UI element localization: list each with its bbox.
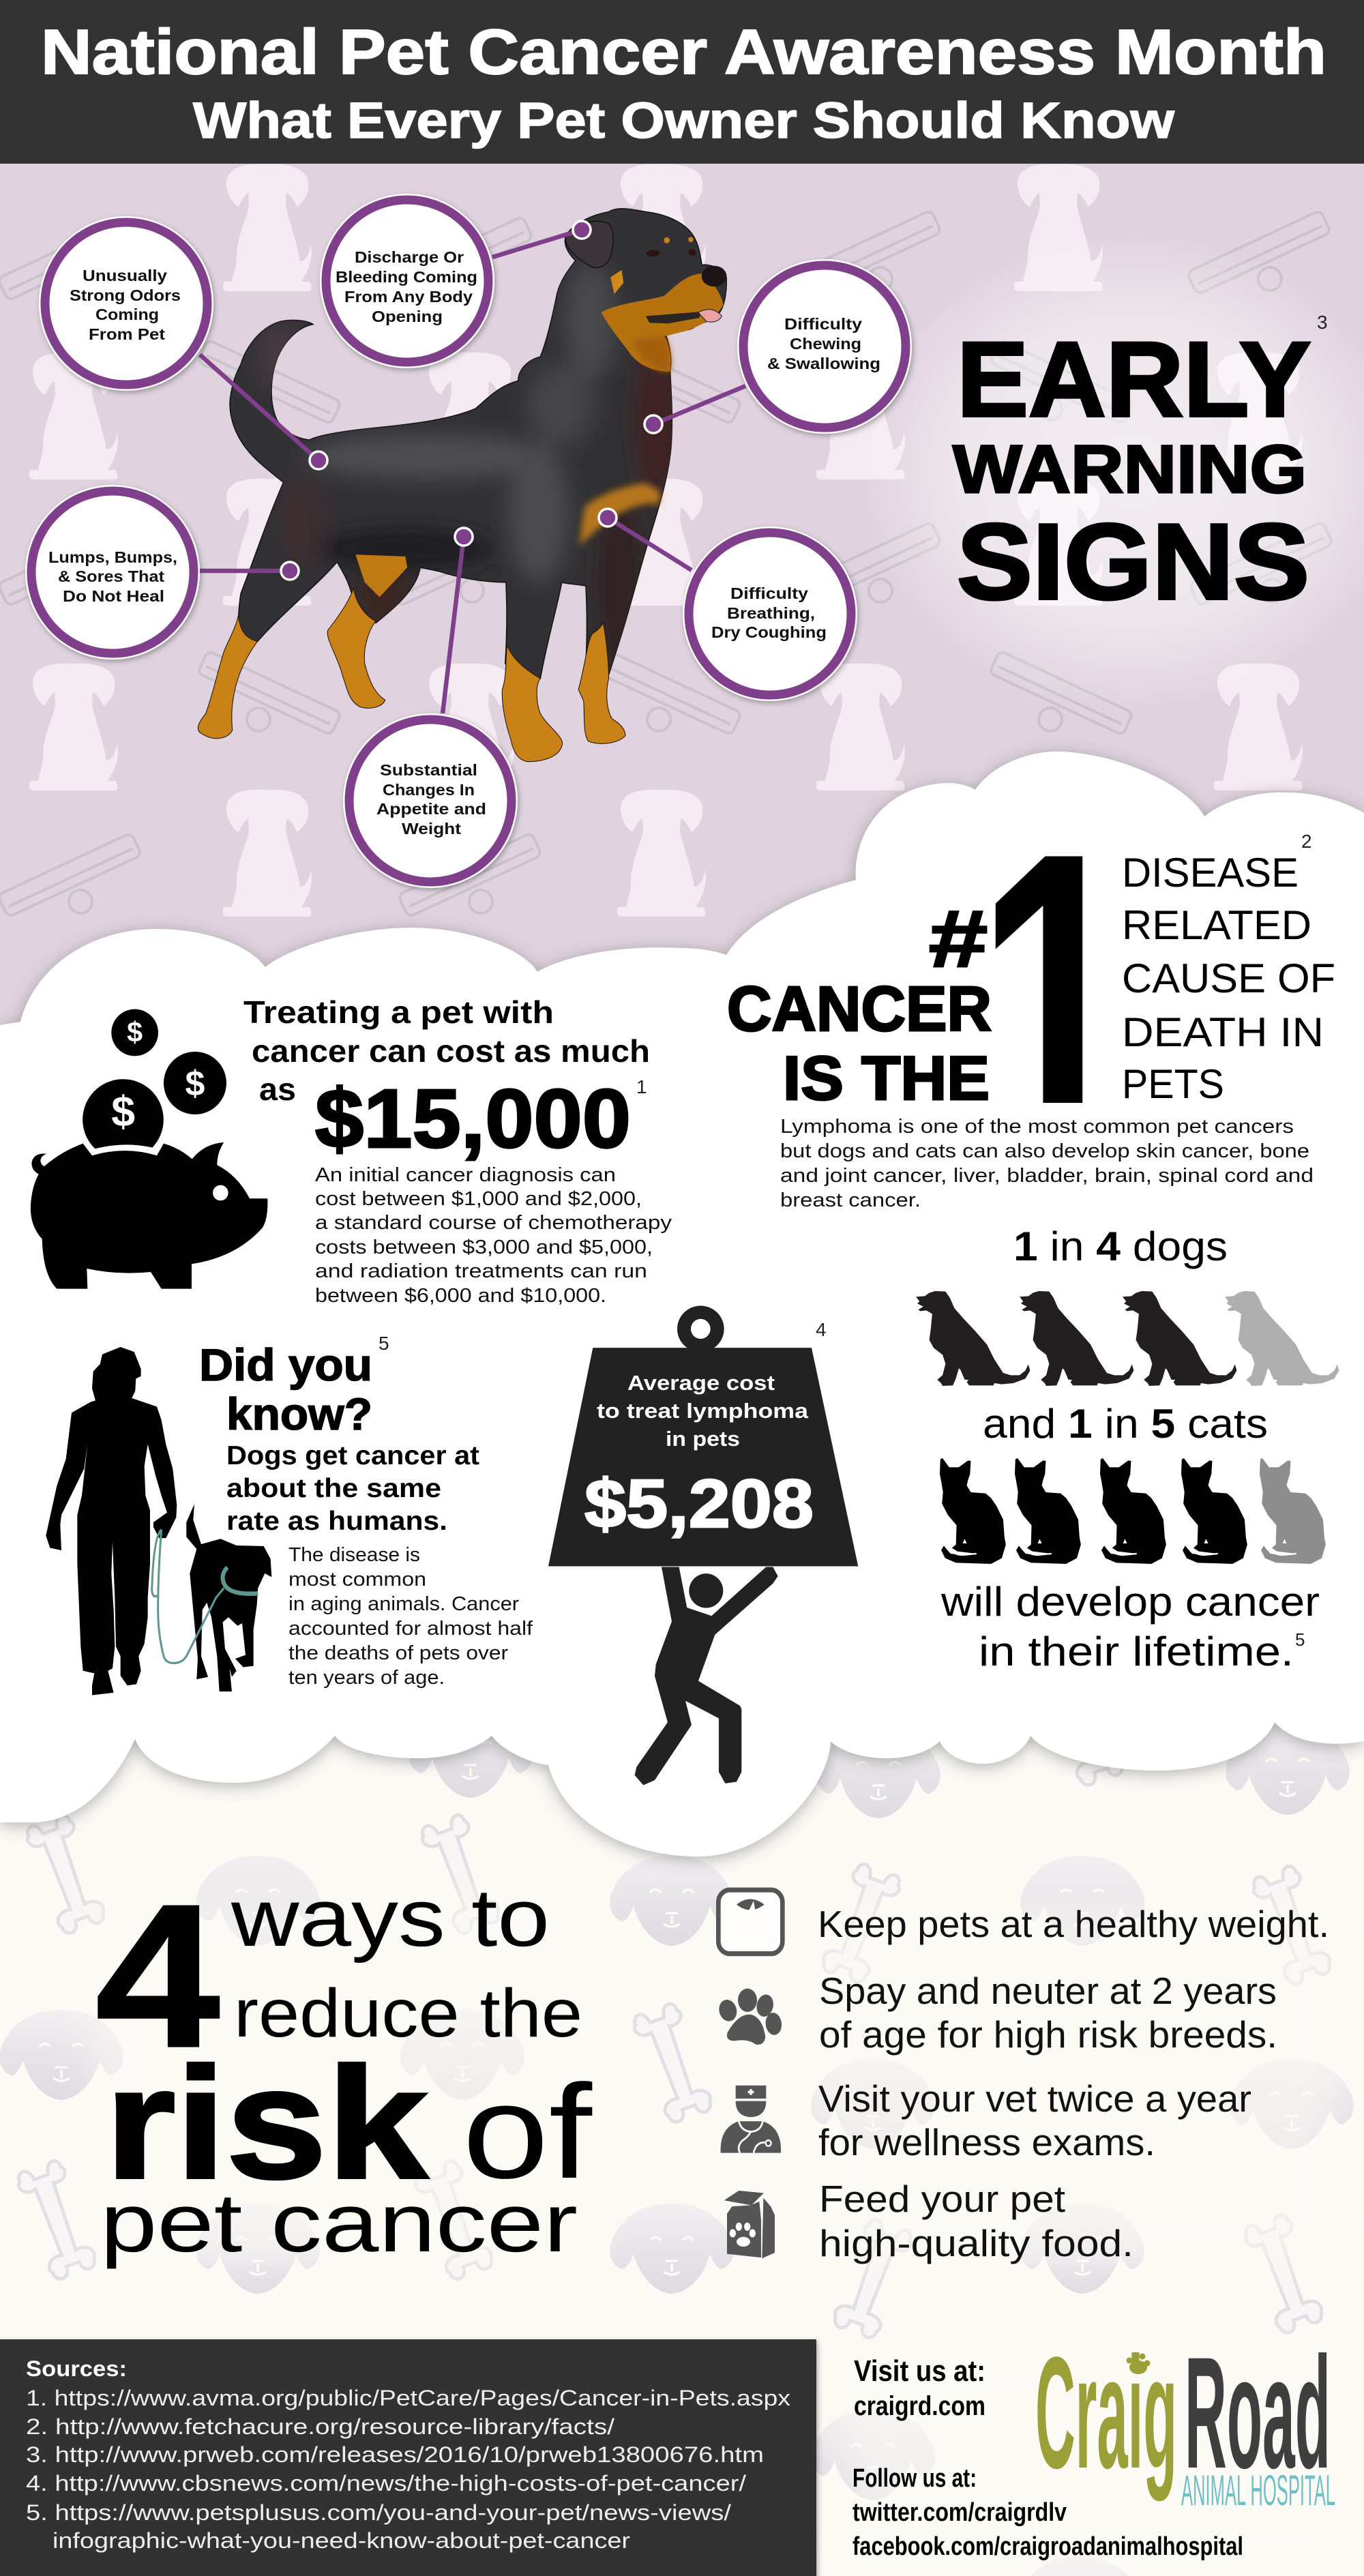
icons: four dogs	[916, 1291, 1339, 1386]
callout: lumps	[25, 485, 200, 660]
soft halo behind cream section text	[95, 1896, 1350, 2571]
icon: logo paw	[1127, 2352, 1150, 2374]
callout: breathing: Difficulty	[730, 584, 808, 602]
source list: 3. http://www.prweb.com/releases/2016/10/prweb13800676.htm	[26, 2442, 764, 2467]
text: did you know: Dogs get cancer at	[226, 1441, 479, 1470]
text: average cost: Average cost	[627, 1371, 775, 1395]
callout: chewing	[737, 259, 912, 434]
panel: sources	[0, 2339, 816, 2576]
text: did you know: about the same	[226, 1474, 441, 1503]
heading: early warning signs: WARNING	[953, 431, 1307, 507]
callout: discharge	[320, 194, 494, 368]
source note 5: 5	[379, 1333, 389, 1354]
text: average cost: to treat lymphoma	[597, 1399, 809, 1423]
text: risk reduction list	[818, 1903, 1329, 2264]
background: purple section	[0, 164, 1364, 1391]
callout: strong odors: Coming	[95, 306, 159, 323]
text: did you know	[199, 1339, 479, 1536]
illustration: rottweiler	[198, 209, 727, 762]
callout: strong odors: From Pet	[89, 325, 165, 343]
source list: 4. http://www.cbsnews.com/news/the-high-costs-of-pet-cancer/	[26, 2471, 746, 2496]
callout: discharge: Bleeding Coming	[336, 268, 477, 286]
text: did you know: rate as humans.	[226, 1507, 447, 1536]
callout: chewing: Difficulty	[784, 315, 862, 333]
text: disease related cause: RELATED	[1122, 902, 1311, 948]
text: contact details: twitter.com/craigrdlv	[853, 2498, 1067, 2527]
text: average cost: $5,208	[584, 1466, 814, 1542]
heading: early warning signs: SIGNS	[957, 502, 1309, 622]
text: cost paragraph	[315, 1164, 672, 1307]
icon: vet	[721, 2086, 781, 2153]
callout: breathing	[683, 527, 857, 701]
text: lymphoma paragraph: and joint cancer, liver, bladder, brain, spinal cord and	[780, 1165, 1314, 1187]
text: contact details: Follow us at:	[853, 2464, 977, 2493]
icon: woman walking dog	[46, 1347, 271, 1696]
callout: appetite: Substantial	[380, 761, 477, 779]
text: lymphoma paragraph: Lymphoma is one of the most common pet cancers	[780, 1116, 1294, 1138]
icons: risk reduction	[716, 1890, 783, 2258]
text: risk reduction list: high-quality food.	[819, 2222, 1133, 2264]
text: risk reduction list: Spay and neuter at 2 years	[819, 1970, 1277, 2012]
icon: piggy bank with coins: $	[127, 1016, 143, 1048]
callout: breathing: Breathing,	[727, 604, 815, 622]
text: treating cost heading: Treating a pet with	[243, 994, 554, 1030]
marker dots	[281, 221, 662, 580]
text: contact details	[853, 2354, 1243, 2561]
callout: lumps: Do Not Heal	[63, 587, 164, 605]
text: risk reduction list: for wellness exams.	[818, 2121, 1155, 2163]
text: did you know: know?	[226, 1389, 372, 1439]
text: cost paragraph: between $6,000 and $10,000.	[315, 1285, 606, 1307]
source list: 2. http://www.fetchacure.org/resource-library/facts/	[26, 2414, 614, 2439]
source note 4: 4	[816, 1319, 827, 1340]
text: disease related cause: DISEASE	[1122, 850, 1299, 895]
text: contact details: Visit us at:	[854, 2354, 985, 2388]
text: will develop cancer: in their lifetime.	[979, 1629, 1294, 1674]
callout: chewing: & Swallowing	[767, 355, 880, 372]
heading: 4 ways to reduce the risk of pet cancer: 4	[95, 1863, 221, 2090]
source list: 1. https://www.avma.org/public/PetCare/Pages/Cancer-in-Pets.aspx	[26, 2386, 790, 2410]
text: lymphoma paragraph: breast cancer.	[780, 1189, 921, 1211]
heading: cancer is the #1: CANCER	[727, 973, 992, 1044]
text: disease paragraph: ten years of age.	[288, 1667, 445, 1689]
text: disease paragraph: in aging animals. Cancer	[288, 1593, 519, 1615]
text: cost paragraph: An initial cancer diagnosis can	[315, 1164, 616, 1186]
text: disease paragraph: The disease is	[288, 1544, 420, 1566]
text: disease paragraph: most common	[288, 1569, 426, 1590]
text: disease related cause: DEATH IN	[1122, 1009, 1324, 1055]
callout: discharge: From Any Body	[344, 288, 473, 306]
icon: scale	[718, 1890, 782, 1954]
callout: breathing: Dry Coughing	[711, 623, 827, 641]
text: risk reduction list: Keep pets at a healthy weight.	[818, 1903, 1329, 1945]
callout: strong odors: Unusually	[83, 267, 167, 284]
source list: infographic-what-you-need-know-about-pet-cancer	[53, 2528, 630, 2553]
text: disease related cause: PETS	[1122, 1061, 1224, 1107]
heading: cancer is the #1	[728, 857, 1083, 1103]
source note 1: 1	[636, 1076, 647, 1097]
text: disease related cause: CAUSE OF	[1122, 956, 1335, 1001]
callout: appetite	[343, 713, 518, 888]
callout: lumps: & Sores That	[58, 567, 164, 585]
heading: 4 ways to reduce the risk of pet cancer: risk	[105, 2035, 428, 2212]
heading: 4 ways to reduce the risk of pet cancer: ways to	[231, 1872, 550, 1964]
source note 2: 2	[1301, 831, 1312, 852]
text: disease paragraph: accounted for almost half	[288, 1618, 533, 1640]
subtitle: What Every Pet Owner Should Know	[193, 92, 1174, 149]
source note 5: 5	[1295, 1629, 1305, 1650]
text: average cost: in pets	[666, 1427, 740, 1451]
icons: five cats	[940, 1458, 1326, 1564]
text: average cost	[584, 1371, 814, 1542]
icon: food bag	[724, 2191, 775, 2258]
icon: man lifting weight	[548, 1306, 858, 1785]
purple pattern: dogs and toys	[0, 164, 1333, 917]
heading: 4 ways to reduce the risk of pet cancer: reduce the	[234, 1975, 582, 2052]
icon: piggy bank with coins: $	[111, 1089, 135, 1136]
glow behind heading	[859, 232, 1364, 709]
text: cost paragraph: cost between $1,000 and $2,000,	[315, 1188, 642, 1210]
text: did you know: Did you	[199, 1339, 372, 1390]
text: risk reduction list: of age for high risk breeds.	[819, 2013, 1277, 2056]
heading: early warning signs	[953, 321, 1311, 622]
text: 1 in 4 dogs: 1 in 4 dogs	[1013, 1224, 1228, 1269]
heading: cancer is the #1: 1	[976, 765, 1136, 1237]
text: cost paragraph: a standard course of chemotherapy	[315, 1212, 672, 1234]
callout: discharge: Discharge Or	[355, 248, 464, 266]
heading: cancer is the #1: IS THE	[783, 1044, 990, 1113]
text: treating cost heading: as	[259, 1071, 296, 1107]
heading: 4 ways to reduce the risk of pet cancer	[95, 1863, 593, 2269]
heading: cancer is the #1: #	[929, 894, 988, 984]
callout: discharge: Opening	[372, 308, 443, 325]
icon: paw	[716, 1989, 783, 2045]
text: will develop cancer: will develop cancer	[940, 1579, 1320, 1625]
text: lymphoma paragraph: but dogs and cats can also develop skin cancer, bone	[780, 1140, 1309, 1162]
callout: appetite: Changes In	[383, 781, 475, 799]
source list: 5. https://www.petsplusus.com/you-and-your-pet/news-views/	[26, 2500, 731, 2525]
heading: 4 ways to reduce the risk of pet cancer: pet cancer	[100, 2176, 578, 2269]
text: risk reduction list: Feed your pet	[819, 2178, 1065, 2220]
text: treating cost heading: cancer can cost as much	[252, 1033, 650, 1069]
cream pattern: faces and bones	[0, 1665, 1354, 2576]
sources heading: Sources:	[26, 2356, 127, 2381]
callout: appetite: Weight	[402, 820, 461, 838]
text: disease paragraph	[288, 1544, 533, 1689]
text: cost paragraph: costs between $3,000 and $5,000,	[315, 1237, 653, 1258]
text: treating cost heading: $15,000	[315, 1072, 631, 1165]
icon: piggy bank with coins	[31, 1009, 267, 1289]
text: and 1 in 5 cats: and 1 in 5 cats	[983, 1401, 1268, 1447]
text: will develop cancer	[940, 1579, 1320, 1674]
callout: lumps: Lumps, Bumps,	[48, 548, 177, 566]
heading: early warning signs: EARLY	[957, 321, 1311, 439]
text: cost paragraph: and radiation treatments can run	[315, 1260, 647, 1282]
background: cream section	[0, 1391, 1364, 2576]
title: National Pet Cancer Awareness Month	[41, 16, 1326, 87]
text: risk reduction list: Visit your vet twice a year	[818, 2077, 1251, 2120]
heading: 4 ways to reduce the risk of pet cancer: of	[462, 2057, 593, 2206]
text: disease related cause	[1122, 850, 1335, 1107]
text: contact details: facebook.com/craigroadanimalhospital	[853, 2532, 1243, 2561]
source note 3: 3	[1317, 312, 1328, 333]
text: lymphoma paragraph	[780, 1116, 1314, 1211]
text: contact details: craigrd.com	[854, 2391, 985, 2421]
white cloud panel	[0, 752, 1364, 1856]
header bar	[0, 0, 1364, 164]
callout: strong odors: Strong Odors	[70, 286, 181, 304]
text: disease paragraph: the deaths of pets over	[288, 1642, 508, 1664]
icon: piggy bank with coins: $	[186, 1064, 205, 1104]
callout: chewing: Chewing	[790, 335, 861, 353]
source list	[26, 2386, 790, 2553]
callout: strong odors	[39, 216, 213, 391]
connector lines	[200, 230, 745, 713]
callout: appetite: Appetite and	[376, 800, 486, 818]
text: treating cost heading	[243, 994, 650, 1165]
